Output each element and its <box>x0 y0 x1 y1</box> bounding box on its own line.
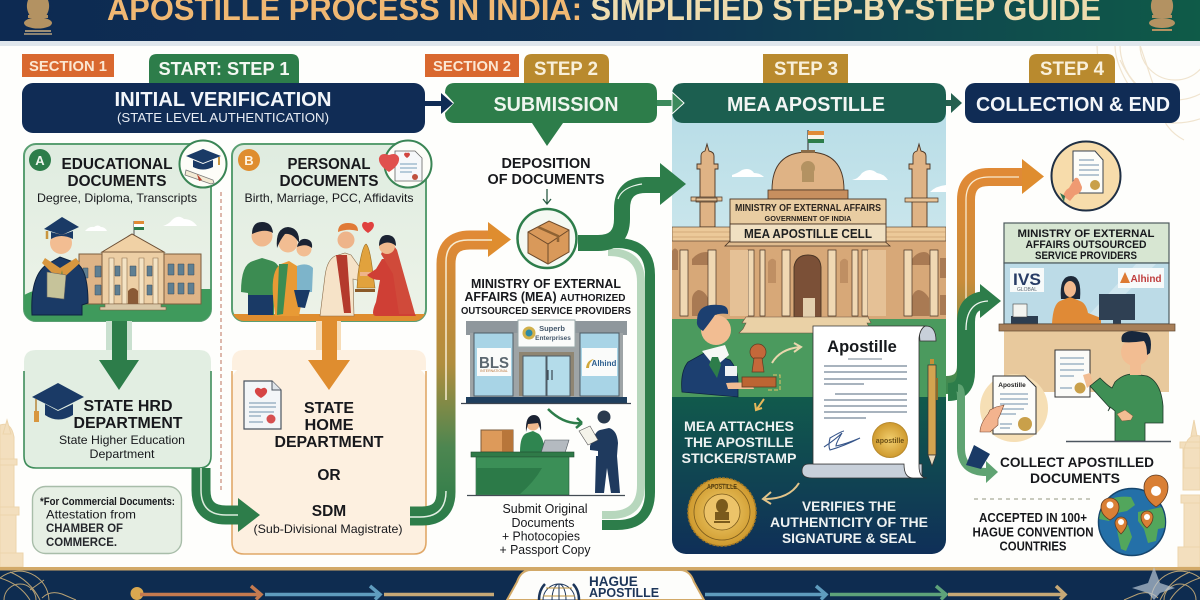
header bar: collection and end: COLLECTION & END <box>976 94 1170 116</box>
text: collect apostilled documents <box>1000 455 1154 486</box>
icon: graduation cap and scroll <box>180 140 226 188</box>
heading: personal documents: PERSONAL <box>288 156 370 173</box>
sign: MEA apostille cell <box>730 224 886 242</box>
illustration: provider counter <box>999 223 1175 392</box>
panel: state HRD department <box>24 350 211 468</box>
text: state higher education department: State Higher Education <box>59 433 185 447</box>
illustration: apostille document: apostille <box>876 438 904 445</box>
icon: document hand-off circle <box>1052 142 1120 210</box>
text: outsourced service providers: MINISTRY OF EXTERNAL <box>1018 228 1155 240</box>
text: MEA authorized providers: AFFAIRS (MEA) AUTHORIZED <box>464 289 626 304</box>
text: accepted in 100+ countries: COUNTRIES <box>1000 540 1066 554</box>
illustration: apostille document: Apostille <box>827 338 897 356</box>
arrow: circle to MEA <box>578 163 686 243</box>
arrow: MEA to collect circle <box>946 159 1044 385</box>
header bar: initial verification: (STATE LEVEL AUTHENTICATION) <box>117 110 329 125</box>
arrow: MEA to service provider <box>948 284 1001 392</box>
text: verifies authenticity: AUTHENTICITY OF THE <box>770 514 928 530</box>
sign: ministry of external affairs: GOVERNMENT OF INDIA <box>764 216 852 223</box>
text: verifies authenticity: SIGNATURE & SEAL <box>782 530 916 546</box>
text: submit documents list: + Passport Copy <box>500 543 591 557</box>
text: state higher education department <box>59 433 185 461</box>
text: submit documents list: Submit Original <box>502 502 588 516</box>
icon: graduation cap <box>32 383 84 422</box>
arrow: educational to state HRD <box>99 321 139 390</box>
sign: BLS: INTERNATIONAL <box>480 369 508 373</box>
sign: Alhind <box>1118 268 1164 288</box>
sign: Alhind: Alhind <box>592 359 617 368</box>
text: collect apostilled documents: COLLECT APOSTILLED <box>1000 455 1154 470</box>
arrow: state HRD to state home <box>201 468 260 532</box>
dashed divider <box>974 498 1093 500</box>
arrow: personal to state home <box>308 321 350 390</box>
sign: IVS global: IVS <box>1013 270 1041 289</box>
arrow: small down gold <box>755 399 764 410</box>
text: MEA attaches sticker <box>682 422 796 464</box>
step 2 tab <box>524 54 609 85</box>
header bar: initial verification <box>22 83 425 133</box>
text: MEA attaches sticker: MEA ATTACHES <box>684 418 794 434</box>
sign: superb enterprises: Enterprises <box>535 335 571 342</box>
heading: educational documents <box>62 156 172 190</box>
icon: globe with pins <box>1098 475 1168 556</box>
arrow: small down <box>543 189 551 204</box>
footer arrows right <box>705 586 1065 600</box>
arrow: submission to MEA <box>657 92 684 114</box>
footer hague apostille badge: HAGUE <box>589 574 638 589</box>
text: deposition of documents: OF DOCUMENTS <box>488 172 605 188</box>
badge B <box>238 149 260 171</box>
panel: educational documents <box>24 140 226 321</box>
icon: heart certificate <box>379 140 432 188</box>
text: verifies authenticity <box>770 502 928 543</box>
arrow: stamp to document <box>772 343 801 363</box>
text: deposition of documents: DEPOSITION <box>502 156 590 172</box>
arrow head: collected documents <box>986 461 998 483</box>
icon: parcel circle <box>518 209 576 268</box>
illustration: apostille document <box>802 326 936 478</box>
footer band <box>0 567 1200 600</box>
text: accepted in 100+ countries: HAGUE CONVENTION <box>972 526 1094 540</box>
section 2 badge <box>425 54 519 77</box>
step 3 tab: STEP 3 <box>774 59 838 80</box>
callout: commercial documents: CHAMBER OF <box>46 521 123 535</box>
footer arrows left <box>130 586 494 600</box>
step 1 tab: START: STEP 1 <box>158 59 290 79</box>
heading: educational documents: DOCUMENTS <box>68 173 166 190</box>
illustration: officer with stamp <box>682 305 780 397</box>
header bar: MEA apostille <box>672 83 946 123</box>
step 4 tab: STEP 4 <box>1040 59 1104 80</box>
text: sub-divisional magistrate: (Sub-Divisional Magistrate) <box>254 522 403 536</box>
callout: commercial documents: Attestation from <box>46 508 136 522</box>
header bar: submission: SUBMISSION <box>494 93 618 116</box>
sign: superb enterprises: Superb <box>539 324 565 333</box>
sign: Alhind <box>582 348 617 376</box>
panel: personal documents <box>232 140 432 321</box>
panel: MEA apostille <box>672 83 946 554</box>
icon: apostille gold seal: APOSTILLE <box>707 482 737 491</box>
text: MEA attaches sticker: THE APOSTILLE <box>684 434 794 450</box>
footer hague apostille badge <box>507 570 704 600</box>
arrow: down to collected documents <box>958 388 987 472</box>
callout: commercial documents <box>32 486 182 554</box>
sign: ministry of external affairs: MINISTRY OF EXTERNAL AFFAIRS <box>735 203 881 214</box>
sign: Alhind: Alhind <box>1130 274 1162 285</box>
header bar: collection and end <box>965 83 1180 123</box>
heading: personal documents: DOCUMENTS <box>280 173 378 190</box>
text: MEA attaches sticker: STICKER/STAMP <box>682 450 796 466</box>
dashed divider <box>220 192 222 493</box>
heading: personal documents <box>280 156 378 190</box>
minaret left <box>0 420 23 567</box>
text: MEA authorized providers: OUTSOURCED SERVICE PROVIDERS <box>461 305 631 317</box>
illustration: MEA building <box>672 130 946 333</box>
section 1 badge: SECTION 1 <box>29 58 107 75</box>
step 1 tab <box>149 54 299 86</box>
decorative footer mandala left <box>0 571 76 600</box>
text: submit documents list <box>500 502 591 557</box>
decorative footer mandala right <box>1124 567 1200 600</box>
sign: superb enterprises <box>518 320 575 347</box>
text: MEA authorized providers <box>461 276 631 317</box>
illustration: family and wedding <box>232 222 426 321</box>
text: submit documents list: + Photocopies <box>502 530 580 544</box>
heading: state home department <box>274 400 384 451</box>
illustration: man holding document <box>1055 331 1171 442</box>
text: deposition of documents <box>488 156 605 188</box>
decorative mandala top right <box>1097 0 1200 140</box>
badge B: B <box>244 153 254 168</box>
heading: state home department: HOME <box>304 417 354 434</box>
section 2 badge: SECTION 2 <box>433 58 511 75</box>
header bar: submission <box>445 83 657 146</box>
heading: state HRD department <box>74 398 183 432</box>
sign: BLS: BLS <box>479 355 509 372</box>
illustration: hand holding apostille: Apostille <box>998 382 1026 389</box>
header bar: MEA apostille: MEA APOSTILLE <box>727 93 885 116</box>
step 3 tab <box>763 54 848 83</box>
text: outsourced service providers: AFFAIRS OUTSOURCED <box>1026 239 1147 251</box>
section 1 badge <box>22 54 114 77</box>
text: MEA authorized providers: MINISTRY OF EXTERNAL <box>471 276 621 291</box>
illustration: service desk and staff <box>467 409 625 496</box>
sign: IVS global <box>1010 268 1044 293</box>
badge A <box>29 149 51 171</box>
heading: educational documents: EDUCATIONAL <box>62 156 172 173</box>
text: outsourced service providers: SERVICE PROVIDERS <box>1035 250 1137 262</box>
text: personal examples: Birth, Marriage, PCC, Affidavits <box>244 191 414 205</box>
illustration: gold pen <box>928 359 938 466</box>
text: educational examples: Degree, Diploma, Transcripts <box>37 191 197 205</box>
woman at counter <box>1052 276 1101 324</box>
header bar: initial verification: INITIAL VERIFICATION <box>114 89 332 111</box>
text: verifies authenticity: VERIFIES THE <box>802 498 896 514</box>
heading: state HRD department: DEPARTMENT <box>74 415 183 432</box>
icon: heart document <box>244 381 281 429</box>
text: outsourced service providers <box>1018 228 1155 262</box>
sign: IVS global: GLOBAL <box>1017 287 1037 293</box>
icon: apostille gold seal <box>688 478 756 546</box>
illustration: hand holding apostille <box>966 374 1048 469</box>
icon: national emblem left <box>24 0 52 35</box>
heading: state HRD department: STATE HRD <box>84 398 172 415</box>
text: state higher education department: Department <box>90 447 155 461</box>
callout: commercial documents: COMMERCE. <box>46 535 117 549</box>
text: or: OR <box>317 467 341 484</box>
text: accepted in 100+ countries: ACCEPTED IN 100+ <box>979 511 1087 525</box>
monitor and printer <box>1011 294 1135 324</box>
illustration: graduate and university <box>24 217 214 321</box>
icon: globe <box>539 584 579 600</box>
text: submit documents list: Documents <box>512 516 574 530</box>
footer hague apostille badge: APOSTILLE <box>589 586 659 600</box>
text: accepted in 100+ countries <box>972 511 1094 554</box>
header band <box>0 0 1200 46</box>
heading: SDM: SDM <box>312 503 346 520</box>
minaret right <box>1178 420 1200 567</box>
sign: ministry of external affairs <box>730 199 886 224</box>
step 4 tab <box>1029 54 1115 85</box>
sign: MEA apostille cell: MEA APOSTILLE CELL <box>744 227 872 241</box>
illustration: service centre shopfront <box>461 320 631 404</box>
sign: BLS <box>477 348 511 376</box>
heading: state home department: STATE <box>304 400 354 417</box>
text: collect apostilled documents: DOCUMENTS <box>1030 471 1120 486</box>
arrow: verification to submission <box>424 93 453 114</box>
arrow: MEA to collection <box>946 93 962 113</box>
badge A: A <box>35 153 45 168</box>
callout: commercial documents: *For Commercial Documents: <box>40 496 175 508</box>
icon: national emblem right <box>1149 0 1175 31</box>
arrow: curved gold to seal <box>763 483 799 504</box>
arrow: state home to provider circle <box>410 222 511 517</box>
arrow: return path on right of providers <box>578 243 650 525</box>
panel: state home department or SDM <box>232 350 426 554</box>
heading: state home department: DEPARTMENT <box>274 434 384 451</box>
step 2 tab: STEP 2 <box>534 59 598 80</box>
